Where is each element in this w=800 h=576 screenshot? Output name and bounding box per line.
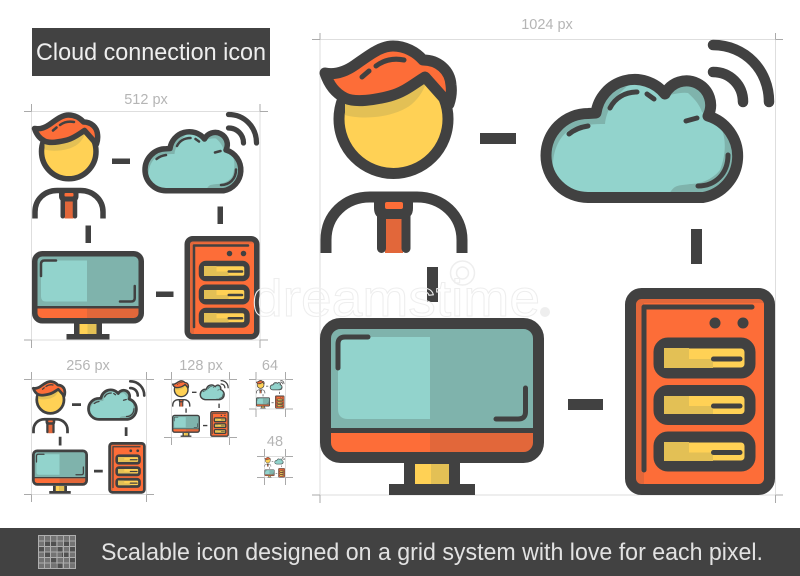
connector: person to cloud [480, 133, 516, 144]
server lights [710, 318, 720, 328]
screen gloss [338, 337, 526, 419]
icon: 128 px version [173, 381, 228, 437]
drive slot 3 [659, 437, 750, 466]
person [325, 46, 462, 253]
cloud outline [546, 79, 738, 198]
guide frame: 64 px [249, 372, 293, 417]
connector: monitor to server [568, 399, 603, 410]
hair highlights [362, 59, 404, 77]
title [32, 28, 270, 76]
connector: person to monitor [427, 267, 438, 302]
monitor bezel band [326, 433, 430, 458]
cloud [546, 79, 738, 198]
watermark: dreamstime [252, 270, 540, 328]
connector: cloud to server [691, 229, 702, 264]
server [630, 294, 770, 490]
icon: 64 px version [256, 380, 284, 408]
monitor [326, 324, 538, 495]
footer bar [0, 528, 800, 576]
size label: 512 px: 512 px [124, 92, 169, 108]
guide frame: 128 px [164, 372, 237, 445]
monitor outline [326, 324, 538, 458]
size label: 1024 px: 1024 px [521, 17, 574, 33]
guide frame: 48 px [257, 449, 293, 485]
drive slot 1 [659, 343, 750, 373]
icon: cloud connection, 1024 px version [325, 45, 770, 495]
tagline: Scalable icon designed on a grid system with love for each pixel. [101, 539, 763, 566]
face shadow [345, 78, 428, 117]
size label: 256 px: 256 px [66, 358, 111, 374]
tie [374, 192, 413, 253]
guide frame: 512 px [24, 104, 268, 348]
drive slot 2 [659, 390, 750, 420]
shoulders [326, 197, 462, 253]
icon: 512 px version [34, 114, 257, 340]
guide frame: 256 px [24, 372, 154, 502]
title: Cloud connection icon [36, 39, 266, 66]
size label: 128 px: 128 px [179, 358, 224, 374]
size label: 64: 64 [262, 358, 278, 374]
screen [326, 324, 538, 458]
icon: 256 px version [33, 381, 144, 494]
head [339, 64, 448, 174]
server gloss line [644, 307, 752, 470]
stand [404, 463, 460, 485]
server body [630, 294, 770, 490]
icon: pixel grid [38, 535, 76, 569]
screen highlight [338, 337, 430, 419]
hair [325, 46, 451, 104]
icon: 48 px version [265, 457, 285, 477]
size label: 48: 48 [267, 434, 283, 450]
guide frame: 1024 px [312, 33, 783, 503]
cloud gloss strokes [569, 92, 728, 186]
cloud body [546, 79, 738, 198]
cloud highlight [553, 84, 725, 197]
icon: wifi signal [713, 45, 769, 102]
